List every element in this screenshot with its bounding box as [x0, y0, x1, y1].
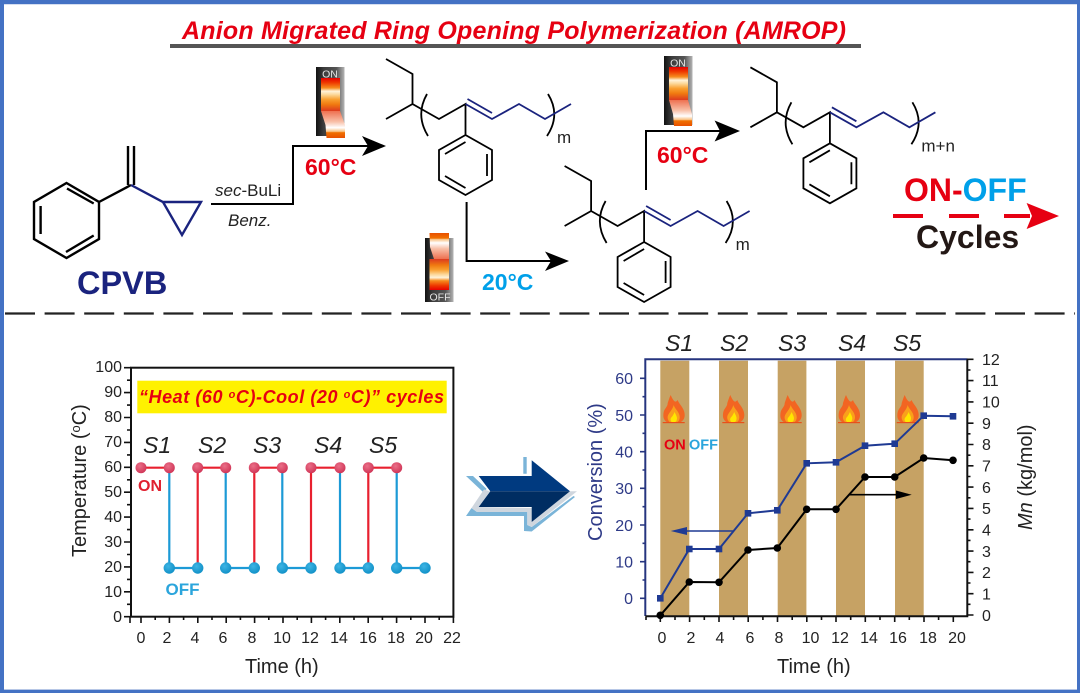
right axis labels: 0: [982, 608, 991, 625]
y axis title: Temperature (: [69, 432, 91, 557]
x axis labels: 20: [948, 630, 966, 647]
stage labels: S2: [720, 330, 748, 356]
x axis labels: 12: [831, 630, 849, 647]
x axis labels: 14: [860, 630, 878, 647]
polymer 1: [386, 59, 571, 195]
x axis labels: 4: [716, 630, 725, 647]
left axis labels: 40: [615, 444, 633, 462]
right axis labels: 10: [982, 394, 1000, 412]
y axis labels: 100: [95, 359, 122, 376]
left axis title: Conversion (%): [585, 403, 607, 541]
right axis labels: 2: [982, 565, 991, 582]
on markers: [136, 462, 402, 473]
icon: flame S3: [780, 395, 802, 423]
ON label: ON: [138, 478, 162, 495]
y axis labels: 80: [104, 409, 122, 426]
repeat label m+n: m+n: [921, 136, 955, 155]
y axis labels: 90: [104, 384, 122, 401]
x axis labels: [137, 630, 461, 647]
on segments: [141, 468, 397, 568]
conversion series: [657, 412, 956, 602]
off segments: [169, 468, 425, 568]
y axis labels: 60: [104, 459, 122, 476]
stage labels: S3: [778, 330, 806, 356]
ON OFF legend: OFF: [689, 438, 718, 454]
title underline: [170, 44, 861, 48]
callout: heat-cool cycles: o: [229, 389, 236, 401]
temperature 60 C first step: 60°C: [305, 154, 356, 180]
x axis title: Time (h): [245, 656, 319, 678]
Cycles label: Cycles: [916, 219, 1019, 255]
x axis labels: 12: [301, 630, 319, 647]
left axis labels: 20: [615, 518, 633, 535]
callout: heat-cool cycles: C)-Cool (20: [236, 387, 343, 407]
x axis labels: 16: [359, 630, 377, 647]
chart: temperature cycles: [68, 359, 461, 678]
arrow: heat step: [646, 120, 740, 190]
right axis labels: 5: [982, 501, 991, 518]
stage labels: S1: [665, 330, 693, 356]
x axis labels: 2: [687, 630, 696, 647]
stage labels: [143, 432, 397, 458]
x axis labels: 4: [191, 630, 200, 647]
right axis labels: 7: [982, 458, 991, 476]
x axis labels: 16: [889, 630, 907, 647]
off markers: [164, 562, 431, 574]
x axis labels: 8: [248, 630, 257, 647]
stage labels: S2: [198, 432, 226, 458]
big block arrow: [466, 457, 577, 532]
callout: heat-cool cycles: [137, 381, 447, 413]
title: Anion Migrated Ring Opening Polymerization (AMROP): [181, 17, 846, 45]
reaction arrow 1: [211, 136, 386, 204]
x axis labels: 10: [273, 630, 291, 647]
polymer 3: [565, 166, 750, 302]
y axis labels: 20: [104, 559, 122, 576]
plot frame and ticks: [124, 368, 453, 623]
x axis labels: 6: [746, 630, 755, 647]
y axis labels: 30: [104, 534, 122, 551]
stage labels: S5: [369, 432, 397, 458]
icon: flame S5: [897, 395, 919, 423]
stage labels: S5: [893, 330, 921, 356]
label: CPVB: CPVB: [77, 265, 167, 301]
x axis labels: 14: [330, 630, 348, 647]
heating bands: [660, 361, 924, 616]
x axis labels: 0: [658, 630, 667, 647]
temperature 20 C: 20°C: [482, 269, 533, 295]
right axis labels: 4: [982, 522, 991, 540]
y axis labels: 10: [104, 584, 122, 601]
repeat label m: m: [557, 128, 571, 147]
x axis labels: 6: [219, 630, 228, 647]
x axis labels: 18: [919, 630, 937, 647]
temperature 60 C second step: 60°C: [657, 142, 708, 168]
chart: conversion and Mn: [585, 330, 1037, 678]
icon: flame S2: [722, 395, 744, 423]
left axis labels: 60: [615, 371, 633, 388]
left axis labels: 30: [615, 481, 633, 498]
OFF label: OFF: [166, 580, 200, 599]
icon: ON switch 2: [664, 56, 692, 126]
right axis labels: [982, 352, 1000, 625]
right axis labels: 11: [982, 373, 999, 390]
monomer CPVB structure: [34, 146, 201, 258]
right axis labels: 8: [982, 437, 991, 454]
icon: ON switch 1: [316, 67, 345, 138]
icon: ON switch 1: ON: [322, 68, 338, 80]
left axis labels: 0: [624, 591, 633, 608]
y axis title: o: [68, 425, 83, 432]
x axis labels: 0: [137, 630, 146, 647]
x axis labels: 22: [443, 630, 461, 647]
icon: flame S4: [838, 395, 860, 423]
left axis labels: 10: [615, 554, 633, 572]
callout: heat-cool cycles: o: [344, 389, 351, 401]
dashed divider: [5, 312, 1075, 315]
y axis labels: [95, 359, 122, 626]
stage labels: S4: [314, 432, 342, 458]
y axis labels: 40: [104, 509, 122, 526]
icon: ON switch 2: ON: [670, 58, 686, 70]
icon: OFF switch: OFF: [430, 292, 450, 304]
callout: heat-cool cycles: “Heat (60: [139, 387, 223, 407]
arrow: Mn axis pointer: [849, 490, 912, 499]
x axis labels: 18: [387, 630, 405, 647]
right axis title: Mn (kg/mol): [1015, 424, 1037, 530]
right axis labels: 1: [982, 586, 991, 604]
polymer 2: [750, 67, 955, 203]
x axis labels: 2: [163, 630, 172, 647]
plot frame and ticks: [640, 359, 974, 622]
solvent: Benz.: Benz.: [228, 211, 271, 230]
left axis labels: 50: [615, 408, 633, 425]
x axis labels: [658, 630, 966, 647]
stage labels: S1: [143, 432, 171, 458]
x axis title: Time (h): [777, 656, 851, 678]
right axis labels: 12: [982, 352, 1000, 369]
y axis title: C): [69, 404, 91, 425]
arrow: conversion axis pointer: [671, 527, 733, 535]
icon: OFF switch: [425, 233, 454, 304]
right axis labels: 6: [982, 480, 991, 497]
y axis labels: 0: [113, 609, 122, 626]
x axis labels: 10: [802, 630, 820, 647]
dashed red arrow: [893, 203, 1059, 229]
left axis labels: [615, 371, 633, 608]
y axis labels: 70: [104, 434, 122, 451]
right axis labels: 3: [982, 544, 991, 561]
reagent: sec-BuLi: sec-BuLi: [215, 181, 281, 200]
stage labels: S3: [253, 432, 281, 458]
repeat label m: m: [736, 235, 750, 254]
y axis labels: 50: [104, 484, 122, 501]
Mn series: [656, 454, 957, 619]
ON-OFF label: ON-OFF: [904, 172, 1027, 208]
right axis labels: 9: [982, 416, 991, 433]
arrow: cool step: [467, 202, 569, 271]
ON OFF legend: ON: [664, 438, 686, 454]
callout: heat-cool cycles: C)” cycles: [351, 387, 444, 407]
icon: flame S1: [663, 395, 685, 423]
stage labels: [665, 330, 921, 356]
x axis labels: 8: [775, 630, 784, 647]
stage labels: S4: [838, 330, 866, 356]
x axis labels: 20: [415, 630, 433, 647]
